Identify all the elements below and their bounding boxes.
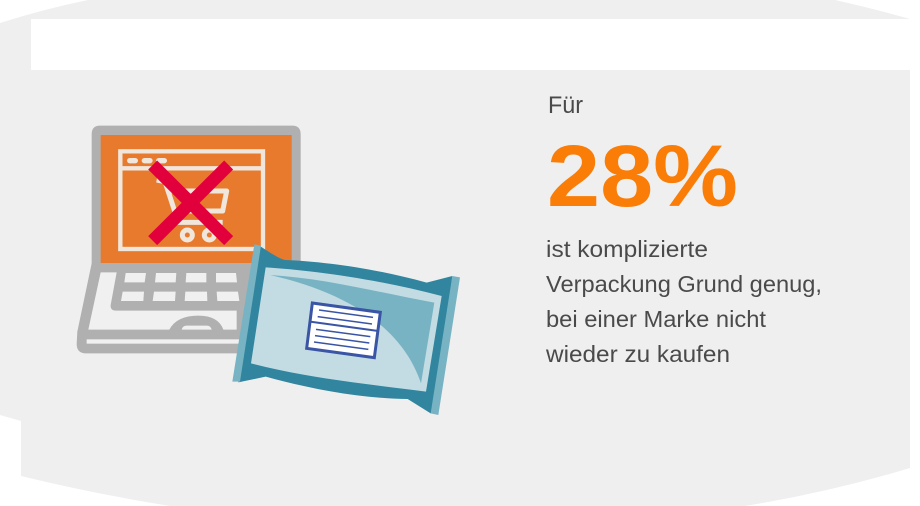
text: description: Verpackung Grund genug,	[546, 271, 822, 297]
statistic: 28%: 28%	[547, 128, 738, 225]
package face	[251, 267, 442, 392]
right seal	[431, 276, 460, 415]
icon: wipes package	[232, 244, 460, 415]
left seal	[232, 244, 261, 382]
package body	[238, 245, 452, 413]
text: Für: Für	[548, 92, 583, 119]
text: description: ist komplizierte	[546, 236, 708, 262]
front edge	[87, 339, 243, 344]
trackpad	[182, 326, 212, 330]
keyboard keys	[121, 273, 239, 301]
icon: laptop	[77, 126, 301, 353]
text: description: wieder zu kaufen	[545, 341, 730, 367]
browser dots	[127, 158, 167, 163]
browser window	[120, 151, 263, 249]
laptop base	[77, 263, 301, 353]
laptop lid	[92, 126, 301, 265]
white header band	[31, 19, 910, 70]
laptop deck	[88, 272, 237, 330]
text: description: bei einer Marke nicht	[546, 306, 767, 332]
text: description	[545, 236, 822, 367]
laptop screen	[101, 135, 292, 263]
icon: shopping cart	[157, 180, 227, 240]
icon: red cross	[153, 165, 229, 241]
package label	[307, 303, 380, 358]
package sheen	[270, 275, 434, 383]
